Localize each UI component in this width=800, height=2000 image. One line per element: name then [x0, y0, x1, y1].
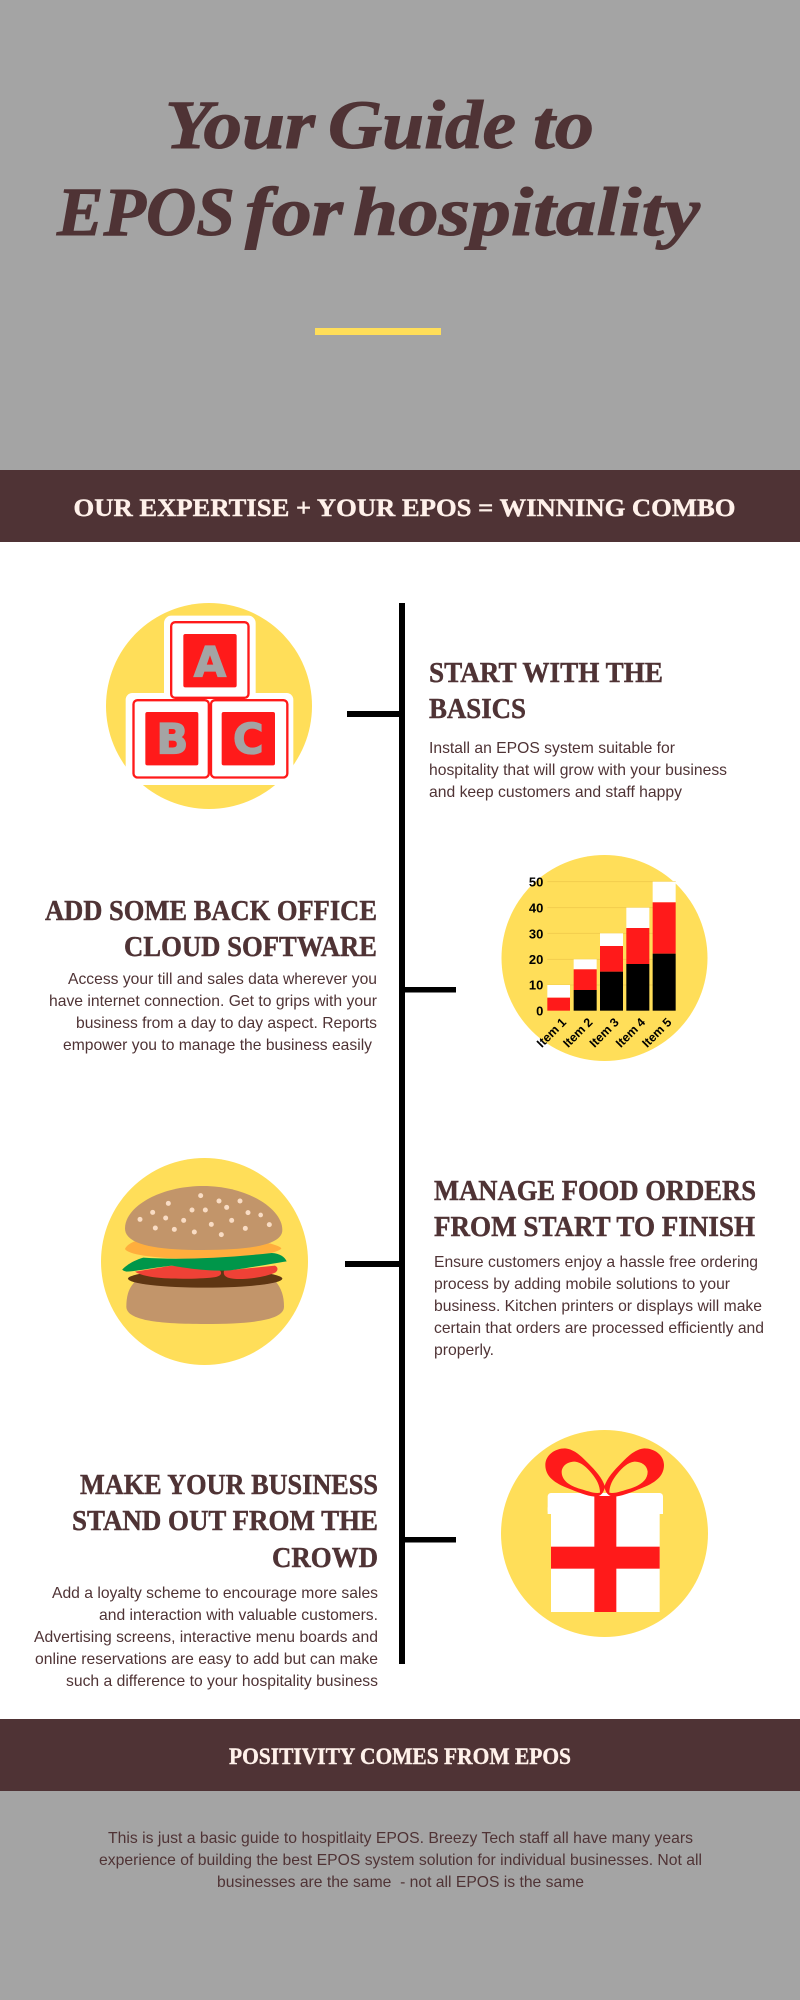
heading: CLOUD SOFTWARE [124, 932, 377, 963]
connector [345, 1261, 399, 1267]
body text: Ensure customers enjoy a hassle free ordering [434, 1254, 758, 1271]
icon: burger [101, 1158, 308, 1365]
heading: FROM START TO FINISH [434, 1212, 755, 1243]
timeline spine [399, 603, 405, 1664]
yellow accent bar [315, 328, 441, 335]
title: EPOS [56, 174, 235, 250]
body text [49, 971, 378, 1054]
icon: stacked bar chart: Item 5 [639, 1015, 675, 1050]
heading: STAND OUT FROM THE [72, 1506, 378, 1537]
heading: ADD SOME BACK OFFICE [45, 896, 377, 927]
panel: footer [0, 1791, 800, 2000]
icon: stacked bar chart: 10 [529, 978, 543, 993]
heading [45, 896, 377, 963]
body text: such a difference to your hospitality business [66, 1673, 378, 1690]
banner: winning combo [0, 470, 800, 542]
heading [434, 1176, 756, 1243]
body text: empower you to manage the business easily [63, 1037, 372, 1054]
body text: Advertising screens, interactive menu boards and [34, 1629, 378, 1646]
body text: business. Kitchen printers or displays will make [434, 1298, 762, 1315]
body text: have internet connection. Get to grips with your [49, 993, 378, 1010]
banner: positivity: POSITIVITY COMES FROM EPOS [229, 1744, 571, 1770]
body text: online reservations are easy to add but can make [35, 1651, 378, 1668]
heading [72, 1470, 378, 1574]
closing text: experience of building the best EPOS system solution for individual businesses. Not all [99, 1852, 702, 1869]
closing text: This is just a basic guide to hospitlaity EPOS. Breezy Tech staff all have many years [108, 1830, 693, 1847]
banner: winning combo: OUR EXPERTISE + YOUR EPOS = WINNING COMBO [74, 495, 736, 522]
connector [405, 1537, 456, 1542]
icon: alphabet blocks: C [233, 714, 264, 763]
heading: MAKE YOUR BUSINESS [80, 1470, 378, 1501]
body text: and keep customers and staff happy [429, 784, 682, 801]
closing text: businesses are the same - not all EPOS is the same [217, 1874, 584, 1891]
body text: certain that orders are processed efficiently and [434, 1320, 764, 1337]
icon: alphabet blocks: A [194, 638, 227, 687]
heading: MANAGE FOOD ORDERS [434, 1176, 756, 1207]
icon: stacked bar chart: 30 [529, 926, 543, 941]
body text: Add a loyalty scheme to encourage more sales [52, 1585, 378, 1602]
panel: step 1 start with the basics [106, 603, 727, 809]
title: hospitality [353, 174, 700, 250]
body text: and interaction with valuable customers. [99, 1607, 378, 1624]
body text: properly. [434, 1342, 494, 1359]
icon: stacked bar chart: 20 [529, 952, 543, 967]
body text: hospitality that will grow with your business [429, 762, 727, 779]
heading: START WITH THE [429, 658, 663, 689]
icon: alphabet blocks [106, 603, 312, 809]
body text [429, 740, 727, 801]
icon: alphabet blocks: B [156, 714, 188, 763]
body text: business from a day to day aspect. Reports [76, 1015, 377, 1032]
icon: stacked bar chart: 40 [529, 900, 543, 915]
banner: positivity [0, 1719, 800, 1791]
icon: stacked bar chart: Item 2 [560, 1015, 596, 1050]
icon: stacked bar chart [502, 855, 708, 1061]
title [56, 87, 700, 250]
body text: Access your till and sales data wherever you [68, 971, 377, 988]
heading [429, 658, 663, 725]
icon: stacked bar chart: 0 [536, 1003, 543, 1018]
icon: stacked bar chart: Item 1 [534, 1015, 569, 1050]
title: for [245, 174, 344, 250]
panel: step 4 stand out from the crowd [34, 1430, 708, 1690]
body text [34, 1585, 378, 1690]
body text: process by adding mobile solutions to your [434, 1276, 731, 1293]
title: to [533, 87, 594, 163]
closing text [99, 1830, 702, 1891]
title: Your [165, 87, 316, 163]
icon: stacked bar chart: Item 3 [587, 1015, 622, 1050]
connector [405, 987, 456, 992]
heading: BASICS [429, 694, 526, 725]
icon: gift box [501, 1430, 708, 1637]
body text: Install an EPOS system suitable for [429, 740, 676, 757]
heading: CROWD [272, 1543, 378, 1574]
body text [434, 1254, 764, 1359]
title: Guide [328, 87, 516, 163]
panel: header [0, 0, 800, 470]
icon: stacked bar chart: Item 4 [613, 1015, 648, 1050]
connector [347, 711, 399, 717]
panel: step 2 back office cloud software [45, 855, 708, 1061]
panel: step 3 manage food orders [101, 1158, 764, 1365]
icon: stacked bar chart: 50 [529, 874, 543, 889]
